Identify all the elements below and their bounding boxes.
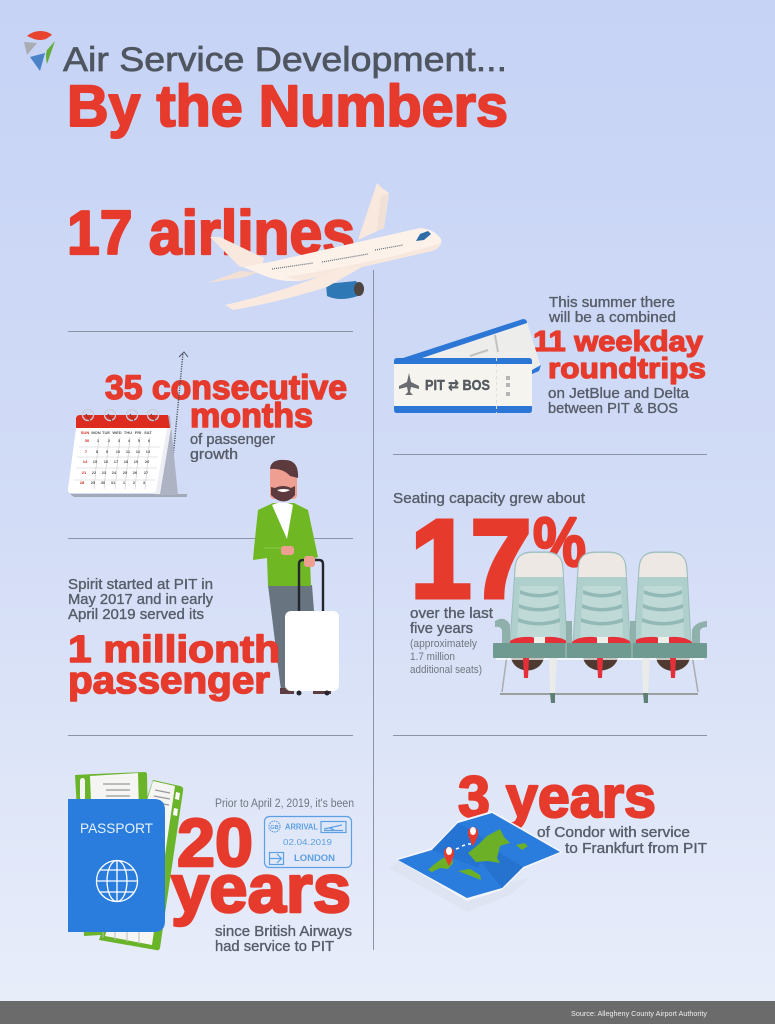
stat: 11 weekday roundtrips: 11 weekday (533, 326, 703, 358)
text: Condor service: to Frankfurt from PIT (565, 841, 707, 857)
icon: calendar: 27 (144, 470, 149, 475)
icon: airplane seats (493, 552, 707, 703)
icon: calendar: 29 (91, 480, 96, 485)
icon: calendar: 25 (123, 470, 128, 475)
stat: 35 consecutive months: 35 consecutive (105, 369, 347, 407)
icon: calendar: 2 (133, 480, 136, 485)
stat: 11 weekday roundtrips: on JetBlue and Delta (548, 386, 690, 402)
stat: 20 years: had service to PIT (215, 939, 334, 955)
icon: calendar: 10 (116, 449, 121, 454)
icon: calendar: 22 (92, 470, 97, 475)
icon: calendar: 6 (148, 438, 151, 443)
icon: calendar: THU (124, 430, 132, 435)
stat: 20 years (171, 798, 354, 955)
footer bar: Source: Allegheny County Airport Authority (571, 1009, 707, 1018)
icon: calendar: 30 (85, 438, 90, 443)
icon: arrival stamp: GB (270, 825, 279, 831)
icon: calendar: 7 (85, 449, 88, 454)
text: Condor service: of Condor with service (537, 825, 690, 841)
text: Condor service (537, 825, 707, 857)
icon: calendar: 12 (136, 449, 141, 454)
text: 1 millionth passenger: passenger (68, 660, 270, 702)
icon: airplane (207, 183, 441, 310)
icon: world map with pins (389, 811, 563, 912)
stat: Spirit intro text: Spirit started at PIT in (68, 577, 213, 593)
stat: 11 weekday roundtrips (533, 295, 706, 417)
stat: seating capacity 17%: (approximately (410, 638, 477, 650)
icon: calendar: 21 (82, 470, 87, 475)
stat: 20 years: since British Airways (215, 924, 352, 940)
icon: calendar: 19 (134, 459, 139, 464)
icon: calendar: 3 (118, 438, 121, 443)
icon: calendar: WED (112, 430, 122, 435)
icon: calendar: 28 (80, 480, 85, 485)
stat: 35 consecutive months: months (190, 397, 313, 435)
stat: seating capacity 17%: over the last (410, 606, 493, 622)
icon: calendar: 15 (93, 459, 98, 464)
icon: calendar: 5 (138, 438, 141, 443)
footer bar (0, 1001, 775, 1024)
icon: calendar: MON (91, 430, 101, 435)
icon: calendar: 26 (133, 470, 138, 475)
icon: calendar: 20 (145, 459, 150, 464)
stat: seating capacity 17%: % (533, 503, 586, 581)
icon: calendar: 11 (126, 449, 131, 454)
icon: calendar: 31 (111, 480, 116, 485)
icon: calendar: 30 (101, 480, 106, 485)
stat: seating capacity 17% (393, 491, 586, 676)
icon: calendar: 13 (146, 449, 151, 454)
stat: 11 weekday roundtrips: will be a combined (548, 310, 676, 326)
icon: calendar: 14 (83, 459, 88, 464)
stat: 20 years: years (171, 851, 351, 927)
stat: Spirit intro text: April 2019 served its (68, 607, 204, 623)
icon: calendar: SUN (81, 430, 89, 435)
stat: 35 consecutive months: of passenger (190, 432, 275, 448)
vertical divider (372, 270, 374, 950)
title: By the Numbers (67, 74, 508, 139)
icon: arrival stamp: ARRIVAL (285, 822, 318, 832)
title: Air Service Development... (63, 41, 507, 79)
stat: 20 years: 20 (177, 805, 253, 881)
horizontal dividers (68, 332, 707, 736)
icon: calendar: 16 (104, 459, 109, 464)
title (63, 41, 508, 139)
icon: calendar: 9 (106, 449, 109, 454)
stat: seating capacity 17%: Seating capacity grew about (393, 491, 585, 507)
stat: 11 weekday roundtrips: roundtrips (548, 353, 706, 385)
icon: arrival stamp (264, 816, 352, 868)
icon: calendar: 1 (97, 438, 100, 443)
icon: boarding passes: PIT ⇄ BOS (425, 377, 490, 394)
icon: calendar: 1 (123, 480, 126, 485)
icon: calendar: FRI (135, 430, 141, 435)
stat: Spirit intro text: May 2017 and in early (68, 592, 214, 608)
icon: passport with boarding passes: PASSPORT (80, 820, 153, 836)
icon: calendar: 4 (128, 438, 131, 443)
stat: seating capacity 17%: additional seats) (410, 664, 482, 676)
stat: Spirit intro text (68, 577, 214, 623)
icon: calendar: 18 (124, 459, 129, 464)
icon: calendar: 17 (114, 459, 119, 464)
arrow: growth trend (173, 352, 188, 458)
icon: boarding passes (394, 319, 541, 413)
icon: calendar: TUE (102, 430, 110, 435)
icon: calendar: SAT (144, 430, 152, 435)
stat: 20 years: Prior to April 2, 2019, it's been (215, 798, 354, 810)
stat: 17 airlines: 17 airlines (67, 199, 355, 268)
icon: calendar: 3 (143, 480, 146, 485)
text: 1 millionth passenger: 1 millionth (68, 629, 280, 671)
icon: arrival stamp: 02.04.2019 (283, 837, 332, 847)
icon: arrival stamp: LONDON (294, 853, 335, 863)
icon: calendar: 23 (102, 470, 107, 475)
stat: 11 weekday roundtrips: This summer there (549, 295, 675, 311)
stat: seating capacity 17%: 17 (411, 498, 531, 621)
icon: calendar: 24 (112, 470, 117, 475)
stat: 35 consecutive months: growth (190, 447, 238, 463)
logo (24, 31, 55, 71)
stat: 35 consecutive months (105, 369, 347, 463)
icon: calendar: 2 (108, 438, 111, 443)
stat: 11 weekday roundtrips: between PIT & BOS (548, 401, 678, 417)
stat: 3 years: 3 years (458, 765, 656, 830)
icon: traveller with suitcase (253, 460, 339, 696)
icon: calendar (68, 410, 187, 497)
stat: seating capacity 17%: five years (410, 621, 473, 637)
icon: passport with boarding passes (68, 772, 183, 950)
text: 1 millionth passenger (68, 629, 280, 702)
stat: seating capacity 17%: 1.7 million (410, 651, 455, 663)
icon: calendar: 8 (96, 449, 99, 454)
